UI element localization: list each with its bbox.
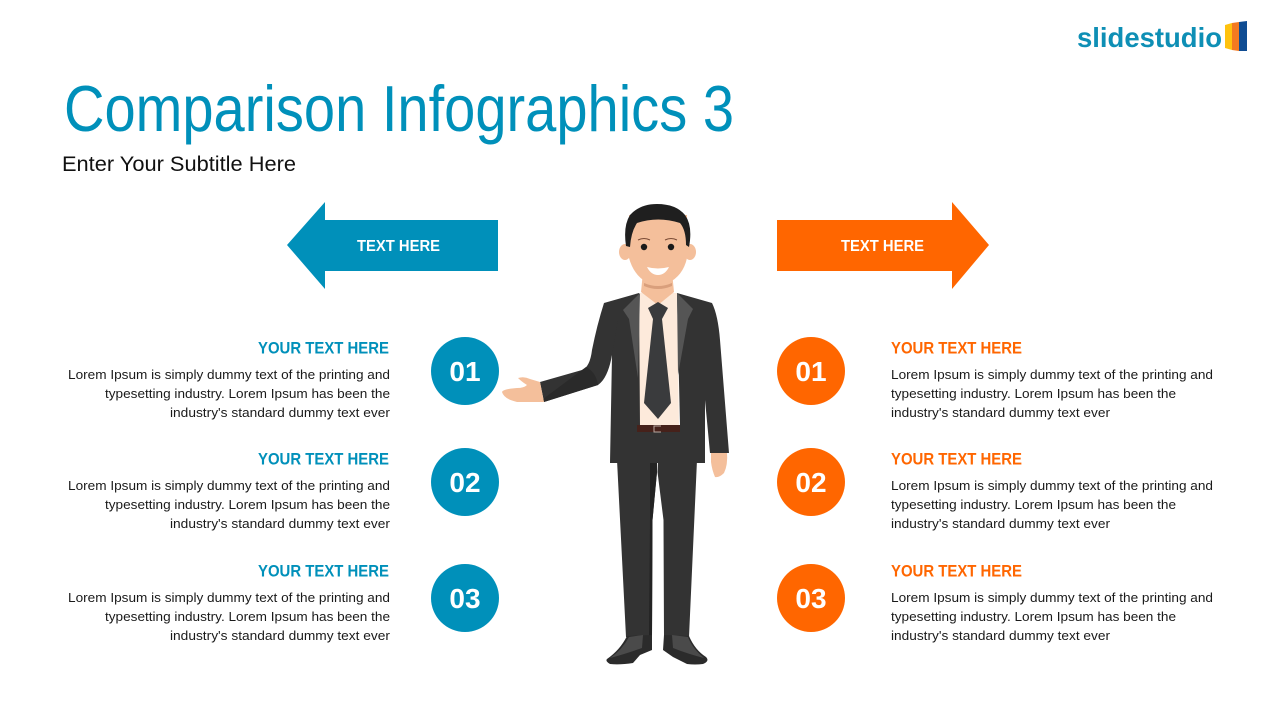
icon: shirt	[638, 293, 679, 426]
arrow: right orange	[777, 202, 989, 289]
title: Comparison Infographics 3	[64, 72, 734, 145]
icon: left arm	[540, 303, 618, 402]
panel: right item 02: typesetting industry. Lorem Ipsum has been the	[891, 497, 1176, 512]
panel: right item 02: industry's standard dummy text ever	[891, 516, 1111, 531]
panel: left item 03	[68, 562, 499, 643]
panel: left item 03: Lorem Ipsum is simply dummy text of the printing and	[68, 590, 390, 605]
panel: left item 02: Lorem Ipsum is simply dummy text of the printing and	[68, 478, 390, 493]
panel: right item 03: 03	[795, 583, 827, 614]
panel: right item 01: typesetting industry. Lorem Ipsum has been the	[891, 386, 1176, 401]
subtitle: Enter Your Subtitle Here	[62, 152, 296, 176]
panel: left item 03: YOUR TEXT HERE	[258, 562, 389, 580]
icon: head	[619, 204, 696, 289]
panel: left item 03: 03	[449, 583, 481, 614]
icon: pointing hand	[502, 377, 544, 402]
panel: left item 01: Lorem Ipsum is simply dummy text of the printing and	[68, 367, 390, 382]
panel: left item 01: 01	[449, 356, 481, 387]
panel: left item 02: YOUR TEXT HERE	[258, 450, 389, 468]
panel: right item 03: industry's standard dummy text ever	[891, 628, 1111, 643]
panel: left item 01: YOUR TEXT HERE	[258, 340, 389, 358]
panel: left item 01	[68, 337, 499, 420]
icon: jacket	[604, 293, 729, 463]
panel: left item 02: typesetting industry. Lorem Ipsum has been the	[105, 497, 390, 512]
icon: shoes	[606, 635, 707, 664]
logo: slidestudio: slidestudio	[1077, 22, 1222, 53]
panel: right item 01: YOUR TEXT HERE	[891, 340, 1022, 358]
panel: left item 02: industry's standard dummy text ever	[170, 516, 391, 531]
icon: trouser legs	[617, 460, 697, 637]
panel: right item 02: Lorem Ipsum is simply dummy text of the printing and	[891, 478, 1213, 493]
panel: left item 01: typesetting industry. Lorem Ipsum has been the	[105, 386, 390, 401]
panel: right item 03: Lorem Ipsum is simply dummy text of the printing and	[891, 590, 1213, 605]
illustration: businessman	[502, 204, 729, 664]
panel: left item 03: typesetting industry. Lorem Ipsum has been the	[105, 609, 390, 624]
icon: belt	[637, 425, 680, 432]
panel: right item 03	[777, 562, 1213, 643]
panel: left item 01: industry's standard dummy text ever	[170, 405, 391, 420]
icon: neck	[641, 272, 674, 305]
panel: right item 01: 01	[795, 356, 827, 387]
panel: right item 01: industry's standard dummy text ever	[891, 405, 1111, 420]
panel: right item 02	[777, 448, 1213, 531]
panel: right item 03: typesetting industry. Lorem Ipsum has been the	[891, 609, 1176, 624]
panel: left item 03: industry's standard dummy text ever	[170, 628, 391, 643]
panel: left item 02	[68, 448, 499, 531]
arrow: left teal	[287, 202, 498, 289]
panel: right item 02: 02	[795, 467, 827, 498]
arrow: right orange: TEXT HERE	[841, 238, 924, 255]
panel: right item 01: Lorem Ipsum is simply dummy text of the printing and	[891, 367, 1213, 382]
icon: tie	[644, 302, 671, 419]
panel: right item 03: YOUR TEXT HERE	[891, 562, 1022, 580]
panel: left item 02: 02	[449, 467, 481, 498]
arrow: left teal: TEXT HERE	[357, 238, 440, 255]
panel: right item 02: YOUR TEXT HERE	[891, 450, 1022, 468]
icon: right hand	[711, 452, 727, 477]
panel: right item 01	[777, 337, 1213, 420]
